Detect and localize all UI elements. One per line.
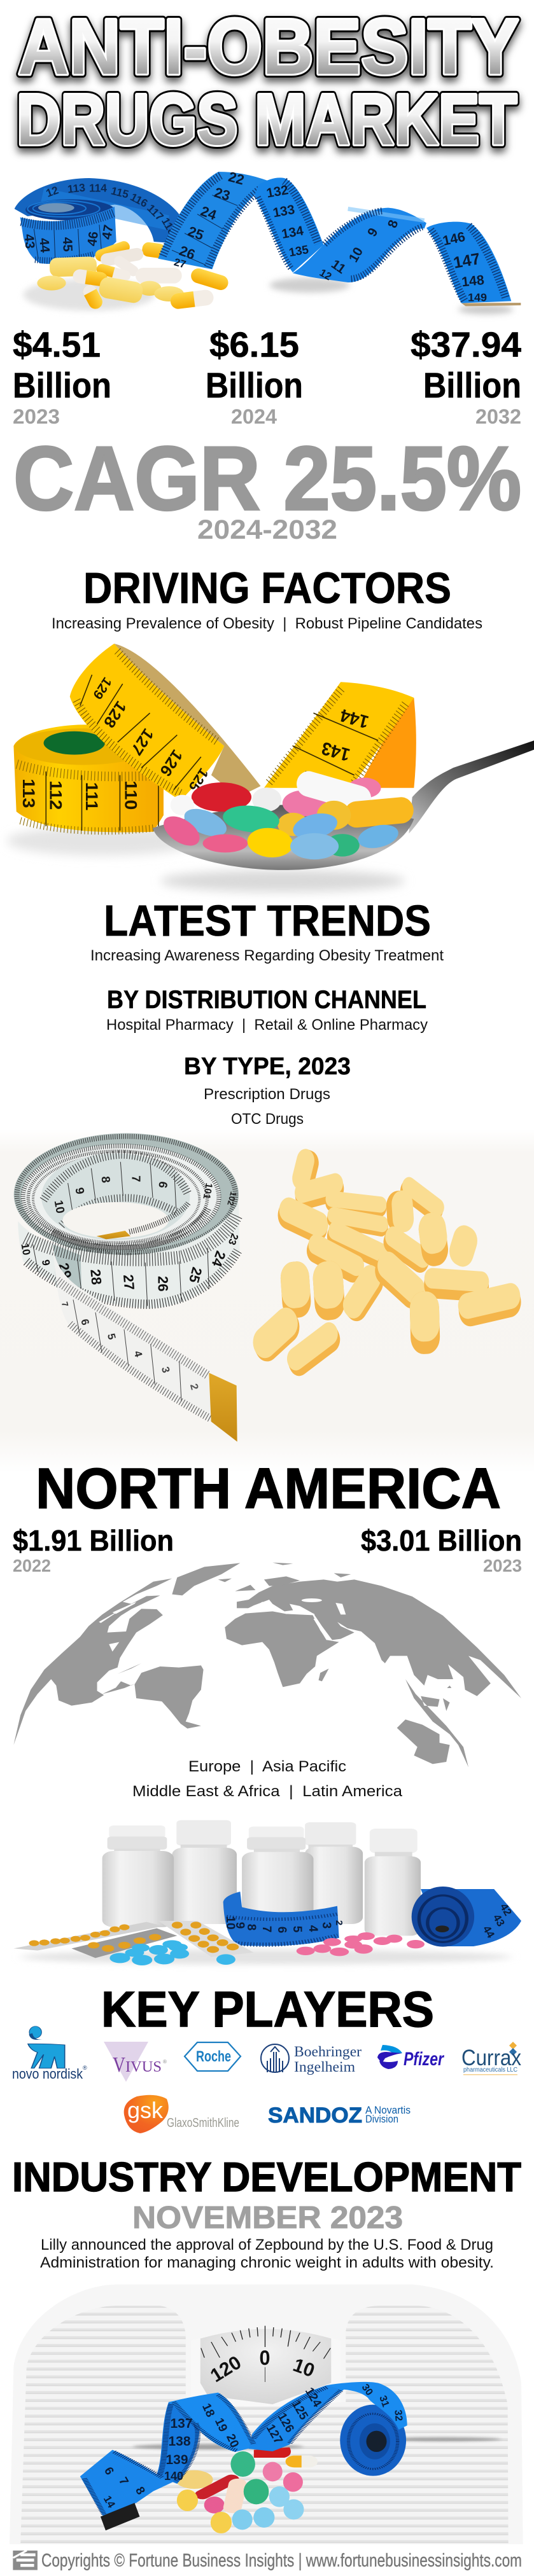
image: grey measuring tape: 9 <box>73 1186 87 1195</box>
band front <box>70 644 224 801</box>
front loop <box>18 1202 240 1308</box>
heading: industry development: INDUSTRY DEVELOPMENT <box>12 2154 521 2200</box>
tape numbers on scale image: 125 <box>289 2398 311 2423</box>
image: blue measuring tape with yellow pills: 47 <box>99 224 116 240</box>
logo: Boehringer Ingelheim <box>261 2044 362 2075</box>
tape numbers on bottles image: 9 <box>233 1922 246 1929</box>
shadow <box>133 2444 303 2449</box>
other regions line 2: Middle East & Africa | Latin America <box>132 1783 403 1800</box>
image: blue measuring tape with yellow pills: 147 <box>452 250 482 272</box>
logo: Pfizer: Pfizer <box>404 2049 445 2070</box>
tape numbers on bottles image: 3 <box>320 1922 333 1929</box>
logo: Vivus <box>104 2042 167 2082</box>
pills <box>192 782 251 812</box>
scale dial numbers: 10 <box>290 2355 318 2381</box>
date: NOVEMBER 2023 <box>132 2201 403 2235</box>
image: blue measuring tape with yellow pills: 133 <box>272 202 296 221</box>
distribution channels: Hospital Pharmacy | Retail & Online Pharmacy <box>106 1016 428 1034</box>
logo: Vivus: IVUS <box>125 2059 162 2075</box>
Madagascar <box>319 1668 329 1681</box>
image: blue measuring tape with yellow pills: 118 <box>159 216 179 237</box>
SE Asia islands <box>405 1679 468 1767</box>
logo: Currax: pharmaceuticals LLC <box>463 2067 517 2074</box>
bottle <box>365 1829 421 1935</box>
image: grey measuring tape <box>14 1133 240 1442</box>
stat: 2023 value: 2023 <box>13 405 60 428</box>
tape numbers on bottles image: 6 <box>275 1927 288 1933</box>
North America 2023 value <box>361 1524 522 1575</box>
image: yellow tape and spoon of colourful pills: 143 <box>320 738 352 765</box>
stat: 2023 value: Billion <box>13 365 111 405</box>
logo: Roche: Roche <box>196 2048 231 2065</box>
image: blue measuring tape with yellow pills: 117 <box>144 202 166 223</box>
tape numbers on scale image: 126 <box>275 2411 297 2435</box>
right band <box>358 698 416 788</box>
image: blue measuring tape with yellow pills: 8 <box>385 218 401 230</box>
pills behind tape <box>141 242 166 259</box>
title <box>17 4 519 160</box>
other regions line 1: Europe | Asia Pacific <box>188 1758 346 1775</box>
South America <box>134 1665 204 1729</box>
development text: Lilly announced the approval of Zepbound by the U.S. Food & Drug <box>41 2236 493 2254</box>
image: yellow tape and spoon of colourful pills: 111 <box>82 782 101 810</box>
spoon <box>409 740 534 833</box>
image: blue measuring tape with yellow pills: 148 <box>461 272 485 290</box>
logo: Boehringer Ingelheim: Boehringer <box>294 2044 362 2060</box>
development text: Administration for managing chronic weight in adults with obesity. <box>40 2254 494 2271</box>
image: grey measuring tape: 101 <box>200 1182 214 1200</box>
image: grey measuring tape: 27 <box>120 1274 137 1291</box>
Central America <box>102 1663 141 1694</box>
logo: Currax <box>461 2042 521 2075</box>
logo: Sandoz: SANDOZ <box>268 2103 362 2128</box>
North America 2022 value: $1.91 Billion <box>13 1524 174 1557</box>
tape numbers on scale image: 6 <box>101 2465 116 2477</box>
image: blue measuring tape with yellow pills: 114 <box>89 182 107 195</box>
stat: 2024 value: $6.15 <box>209 324 299 364</box>
image: blue measuring tape with yellow pills: 46 <box>85 230 101 247</box>
image: blue measuring tape with yellow pills: 45 <box>60 237 75 252</box>
tape drop 146-149 <box>426 222 511 303</box>
coil top <box>25 199 115 221</box>
image: blue measuring tape with yellow pills: 23 <box>213 184 232 204</box>
footer band <box>0 2544 534 2576</box>
image: grey measuring tape: 9 <box>39 1259 52 1266</box>
image: blue measuring tape with yellow pills: 12 <box>45 183 60 200</box>
tape numbers on bottles image <box>223 1901 514 1941</box>
image: blue measuring tape with yellow pills: 11 <box>328 257 348 277</box>
Eurasia <box>237 1579 521 1698</box>
image background: white wood <box>0 1129 534 1472</box>
stat: 2032 value: 2032 <box>475 405 521 428</box>
image: grey measuring tape: 102 <box>225 1191 238 1207</box>
image: grey measuring tape: 7 <box>129 1175 143 1182</box>
blister packs <box>13 1922 164 1951</box>
heading: latest trends: LATEST TRENDS <box>104 896 431 945</box>
heading: key players: KEY PLAYERS <box>101 1981 434 2037</box>
image: blue measuring tape with yellow pills: 115 <box>109 184 130 201</box>
image: grey measuring tape: 25 <box>186 1266 205 1285</box>
tape numbers on bottles image: 2 <box>334 1920 344 1925</box>
logo: Vivus: ® <box>163 2059 167 2065</box>
logo: Sandoz: Division <box>365 2113 398 2125</box>
bottle <box>242 1827 313 1924</box>
image: blue measuring tape with yellow pills: 134 <box>281 223 305 242</box>
pills <box>176 2448 318 2533</box>
image: grey measuring tape: 26 <box>155 1276 171 1292</box>
tape down loop 132-135 <box>255 177 323 272</box>
image: blue measuring tape with yellow pills: 44 <box>36 237 52 254</box>
bottle <box>172 1820 237 1924</box>
Africa <box>225 1611 339 1687</box>
image: yellow tape and spoon of colourful pills: 127 <box>127 725 157 758</box>
image: grey measuring tape: 5 <box>105 1332 118 1341</box>
image: grey measuring tape: 3 <box>159 1366 172 1375</box>
image: blue measuring tape with yellow pills: 26 <box>177 242 197 263</box>
heading: North America: NORTH AMERICA <box>36 1457 501 1521</box>
logo: Roche <box>185 2042 241 2071</box>
heading: driving factors: DRIVING FACTORS <box>83 564 451 613</box>
stat: 2023 value <box>13 324 111 428</box>
image: yellow tape and spoon of colourful pills: 129 <box>90 674 114 702</box>
Australia <box>397 1719 450 1764</box>
tail <box>52 1243 211 1422</box>
tape numbers on bottles image: 8 <box>244 1924 258 1930</box>
tape rising segment <box>158 172 269 269</box>
tape numbers on bottles image: 10 <box>223 1916 237 1930</box>
stat: 2024 value: 2024 <box>231 405 277 428</box>
stat: 2024 value: Billion <box>206 365 303 405</box>
North America 2022 value: 2022 <box>13 1556 51 1575</box>
tape numbers on scale image: 32 <box>392 2409 404 2421</box>
image: grey measuring tape: 10 <box>52 1199 67 1214</box>
logo: GSK: gsk <box>127 2097 164 2123</box>
tape numbers on bottles image: 43 <box>491 1912 507 1929</box>
tape numbers on scale image: 124 <box>302 2385 324 2410</box>
image: blue measuring tape with yellow pills: 25 <box>186 223 206 244</box>
tape numbers on bottles image: 42 <box>498 1901 514 1918</box>
image: yellow tape and spoon of colourful pills: 142 <box>301 767 333 794</box>
image: grey measuring tape: 10 <box>18 1242 32 1256</box>
tape numbers on bottles image: 44 <box>481 1923 497 1941</box>
hole <box>62 1202 169 1238</box>
tape numbers on scale image: 30 <box>360 2382 375 2398</box>
image: blue measuring tape with yellow pills: 132 <box>265 183 290 201</box>
image: blue measuring tape with yellow pills: 10 <box>346 245 366 265</box>
tape numbers on scale image: 31 <box>377 2394 391 2409</box>
band inner <box>114 644 261 797</box>
image: orange-cream tablets <box>248 1146 523 1381</box>
tape numbers on scale image: 19 <box>212 2416 230 2434</box>
image: yellow tape and spoon of colourful pills <box>7 644 534 892</box>
image: yellow tape and spoon of colourful pills: 126 <box>157 746 185 780</box>
image: blue measuring tape with yellow pills: 12 <box>318 267 334 283</box>
logo: Boehringer Ingelheim: Ingelheim <box>294 2059 355 2075</box>
lower rings <box>53 1208 208 1249</box>
logo: GSK: GlaxoSmithKline <box>167 2116 239 2130</box>
image: blue measuring tape with yellow pills: 43 <box>22 233 38 249</box>
tape <box>80 2450 174 2517</box>
tape numbers on scale image: 8 <box>132 2484 148 2497</box>
tape numbers on bottles image: 5 <box>290 1926 304 1933</box>
tape numbers on scale image: 7 <box>116 2475 131 2488</box>
inner band <box>41 1153 190 1240</box>
image: yellow tape and spoon of colourful pills: 110 <box>122 780 141 810</box>
coil front band <box>20 207 116 264</box>
brass tip <box>209 1373 237 1442</box>
image: grey measuring tape: 23 <box>226 1232 240 1247</box>
image: blue measuring tape with yellow pills: 146 <box>441 229 467 249</box>
image: blue measuring tape with yellow pills: 149 <box>468 291 487 303</box>
scale dial numbers: 0 <box>260 2346 270 2369</box>
heading: by type: BY TYPE, 2023 <box>184 1053 351 1080</box>
North America 2023 value: 2023 <box>483 1556 522 1575</box>
image: blue measuring tape with yellow pills: 24 <box>199 203 219 223</box>
image: grey measuring tape: 6 <box>78 1318 92 1327</box>
ribbed pads <box>20 2306 509 2545</box>
image: grey measuring tape: 8 <box>99 1175 113 1184</box>
heading: by distribution channel: BY DISTRIBUTION CHANNEL <box>107 986 426 1014</box>
footer logo <box>13 2551 38 2570</box>
tape numbers on scale image: 14 <box>101 2493 118 2510</box>
type item: OTC: OTC Drugs <box>231 1111 304 1128</box>
stat: 2032 value <box>411 324 521 428</box>
tape numbers on scale image: 138 <box>168 2434 191 2449</box>
pink tablets <box>297 1932 425 1956</box>
image: blue measuring tape with yellow pills: 113 <box>67 181 86 195</box>
logo: Novo Nordisk: ® <box>83 2065 87 2071</box>
image: grey measuring tape: 24 <box>209 1249 229 1270</box>
CAGR period: 2024-2032 <box>197 515 337 545</box>
image: grey measuring tape: 6 <box>156 1181 171 1189</box>
logo: Pfizer <box>377 2045 445 2070</box>
blue tablets <box>109 1940 235 1965</box>
image: blue measuring tape with yellow pills: 22 <box>227 169 246 188</box>
tape numbers on scale image: 137 <box>170 2416 193 2431</box>
logo: Sandoz: A Novartis <box>365 2104 411 2116</box>
image: blue measuring tape with yellow pills: 27 <box>172 256 187 270</box>
tape crest 8-12 <box>293 208 426 282</box>
image: grey measuring tape: 28 <box>87 1268 104 1285</box>
bottle <box>102 1825 174 1927</box>
scale dial numbers <box>207 2346 318 2386</box>
logo: Vivus: V <box>113 2053 125 2077</box>
outer coil <box>14 1133 239 1256</box>
tape numbers on scale image: 127 <box>263 2422 285 2446</box>
scale dial numbers: 120 <box>207 2352 245 2386</box>
world map <box>13 1563 521 1767</box>
image: yellow tape and spoon of colourful pills: 112 <box>46 780 66 810</box>
yellow tape roll <box>13 724 164 832</box>
image: grey measuring tape: 7 <box>60 1301 70 1308</box>
bottle <box>305 1822 363 1924</box>
image: yellow tape and spoon of colourful pills: 144 <box>338 705 370 733</box>
logo: Currax: Currax <box>461 2046 521 2070</box>
image: yellow tape and spoon of colourful pills: 113 <box>19 779 38 808</box>
seas <box>302 1598 322 1602</box>
image: grey measuring tape: 4 <box>132 1350 145 1359</box>
type item: prescription: Prescription Drugs <box>204 1086 330 1103</box>
Greenland <box>172 1563 240 1595</box>
logo: Novo Nordisk <box>12 2026 87 2082</box>
tape numbers on scale image <box>101 2382 404 2510</box>
logo: GSK <box>124 2095 239 2133</box>
development text <box>40 2236 494 2271</box>
image: grey measuring tape: 2 <box>188 1382 201 1391</box>
back of coil band <box>15 178 180 243</box>
stat: 2032 value: Billion <box>423 365 521 405</box>
driving factors list: Increasing Prevalence of Obesity | Robust Pipeline Candidates <box>52 615 482 632</box>
North America <box>13 1579 172 1745</box>
scale body <box>10 2285 523 2545</box>
latest trends text: Increasing Awareness Regarding Obesity Treatment <box>90 947 444 964</box>
tape numbers on bottles image: 4 <box>306 1925 320 1932</box>
image: blue measuring tape with yellow pills: 9 <box>365 226 381 239</box>
logo: Sandoz <box>268 2103 411 2128</box>
tape numbers on scale image: 18 <box>199 2402 217 2420</box>
stat: 2024 value <box>206 324 303 428</box>
blue tape band <box>223 1892 339 1946</box>
image: yellow tape and spoon of colourful pills: 128 <box>100 698 129 731</box>
tape numbers on scale image: 20 <box>223 2432 241 2450</box>
blue tape roll <box>421 1889 521 1946</box>
stat: 2023 value: $4.51 <box>13 324 101 364</box>
dial <box>191 2329 341 2406</box>
image: white bottles, blister packs and blue tape <box>13 1820 521 1965</box>
tape numbers on scale image: 139 <box>165 2453 188 2467</box>
image: yellow tape and spoon of colourful pills: 125 <box>186 765 211 794</box>
image: blue measuring tape with yellow pills: 135 <box>288 242 309 259</box>
tape numbers on scale image: 140 <box>164 2470 183 2483</box>
stat: 2032 value: $37.94 <box>411 324 521 364</box>
tape numbers on bottles image: 7 <box>260 1926 273 1932</box>
image: grey measuring tape: 29 <box>55 1261 74 1280</box>
logo: Novo Nordisk: novo nordisk <box>12 2066 83 2082</box>
image: bathroom scale with tape and pills <box>10 2285 523 2545</box>
North America 2023 value: $3.01 Billion <box>361 1524 522 1557</box>
image: blue measuring tape with yellow pills: 116 <box>128 190 150 210</box>
North America 2022 value <box>13 1524 174 1575</box>
image: blue measuring tape with yellow pills <box>15 169 521 314</box>
